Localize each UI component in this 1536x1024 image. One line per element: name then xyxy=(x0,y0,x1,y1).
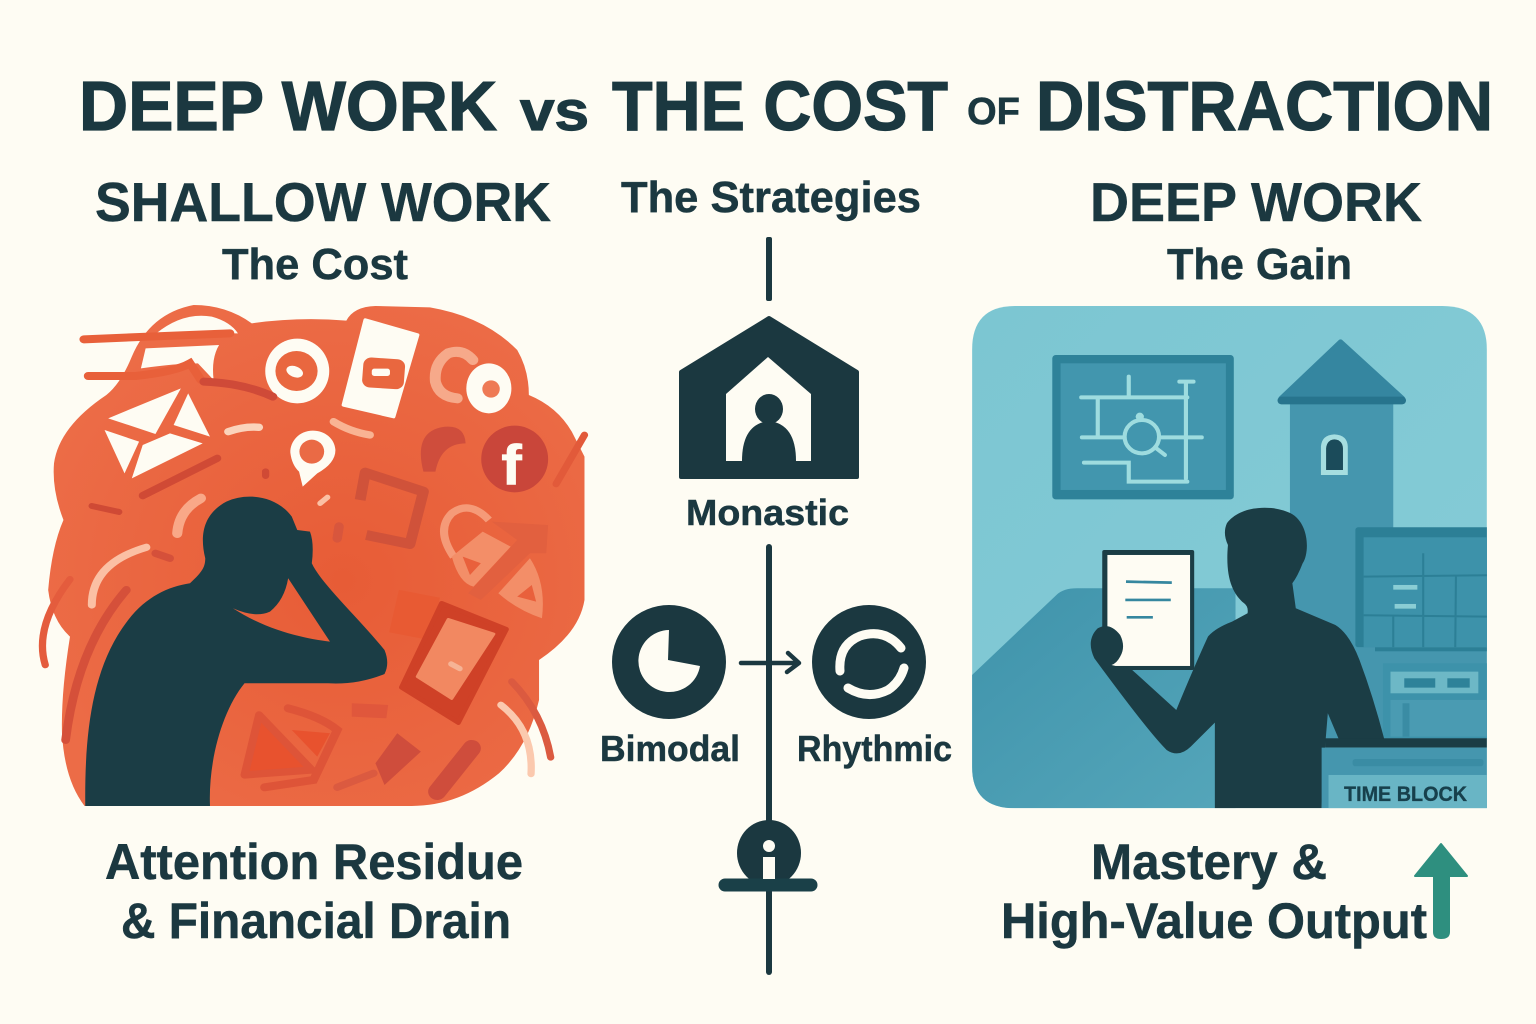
caption: attention residue: & Financial Drain xyxy=(121,893,511,949)
label: rhythmic: Rhythmic xyxy=(797,728,952,769)
heading: deep work: The Gain xyxy=(1167,240,1352,289)
icon: facebook badge: f xyxy=(501,433,522,497)
caption: attention residue xyxy=(105,834,523,949)
title: DISTRACTION xyxy=(1036,67,1493,145)
heading: shallow work: SHALLOW WORK xyxy=(95,171,551,233)
room background xyxy=(972,306,1487,808)
icon: play triangle and scraps xyxy=(245,703,472,792)
silhouette: stressed person xyxy=(85,497,387,806)
arrow: growth up xyxy=(1415,844,1467,938)
icon: dark curved tag xyxy=(421,427,466,472)
icon: location pin bubble xyxy=(290,431,335,487)
caption: mastery: Mastery & xyxy=(1091,834,1327,890)
strategy: monastic xyxy=(681,318,857,533)
heading: shallow work xyxy=(95,171,551,289)
icon: envelope xyxy=(105,388,210,478)
icon: tablet xyxy=(402,603,506,723)
caption: attention residue: Attention Residue xyxy=(105,834,523,890)
caption: mastery: High-Value Output xyxy=(1001,893,1427,949)
caption: mastery xyxy=(1001,834,1427,949)
heading: deep work: DEEP WORK xyxy=(1090,171,1422,233)
heading: the strategies: The Strategies xyxy=(621,173,921,222)
icon: clock pie xyxy=(612,605,726,719)
title: OF xyxy=(967,91,1020,133)
icon: bracket frame xyxy=(360,473,423,544)
icon: cycle arrows xyxy=(812,605,926,719)
strategy: rhythmic xyxy=(797,605,952,769)
heading: shallow work: The Cost xyxy=(222,240,408,289)
panel: deep work illustration xyxy=(972,306,1490,808)
desk edge xyxy=(1325,738,1487,748)
title: DEEP WORK xyxy=(79,67,497,145)
icon: speech outline and motion lines xyxy=(84,316,238,380)
heading: deep work xyxy=(1090,171,1422,289)
tower xyxy=(1278,339,1406,648)
icon: info balance xyxy=(720,820,816,890)
time block label: TIME BLOCK xyxy=(1344,783,1467,806)
calendar screen xyxy=(1355,527,1490,647)
icon: notification ring xyxy=(265,339,329,403)
tablet with notes xyxy=(1102,550,1194,670)
title: THE COST xyxy=(612,67,948,145)
desk equipment xyxy=(1325,647,1489,739)
scattered dashes xyxy=(42,422,584,774)
title xyxy=(79,67,1493,145)
silhouette: focused person xyxy=(1091,508,1384,808)
title: vs xyxy=(520,79,589,142)
framed blueprint xyxy=(1052,355,1234,499)
label: bimodal: Bimodal xyxy=(600,728,740,769)
panel: shallow work illustration xyxy=(42,305,584,806)
hill xyxy=(972,588,1236,808)
distraction cloud xyxy=(48,305,584,806)
icon: letter C and ring xyxy=(435,352,511,413)
icon: facebook badge xyxy=(481,426,548,497)
timeline: main connector xyxy=(766,544,772,975)
timeline: upper connector xyxy=(766,237,772,301)
icon: house with person xyxy=(681,318,857,477)
icon: padlock shapes xyxy=(444,508,548,618)
arrow: bimodal to rhythmic xyxy=(741,653,799,672)
time block card xyxy=(1322,748,1487,808)
icon: orange square xyxy=(389,590,440,640)
icon: phone xyxy=(343,320,418,417)
strategy: bimodal xyxy=(600,605,740,769)
label: monastic: Monastic xyxy=(686,492,849,533)
